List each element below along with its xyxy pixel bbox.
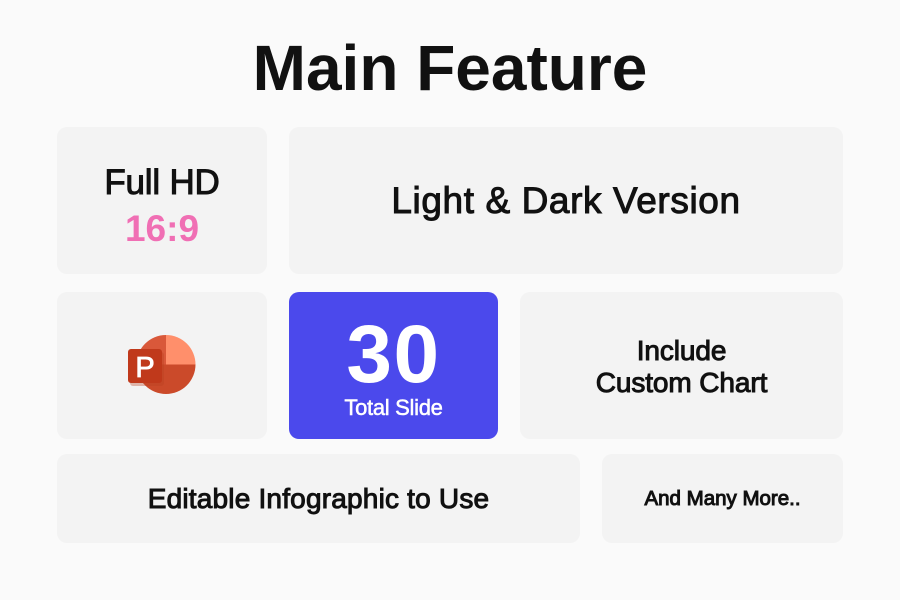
- icon: powerpoint logo: [128, 335, 196, 394]
- number: 30: 30: [346, 309, 441, 400]
- label: 16:9: 16:9: [125, 208, 199, 249]
- panel: powerpoint: [57, 292, 267, 439]
- label: light and dark version: Light & Dark Version: [391, 180, 741, 221]
- title: Main Feature: [253, 32, 647, 104]
- panel: editable infographic: [57, 454, 580, 543]
- panel: and many more: [602, 454, 843, 543]
- panel: light and dark version: [289, 127, 843, 274]
- label: include custom chart: Custom Chart: [596, 367, 767, 398]
- panel: total slide: [289, 292, 498, 439]
- panel: include custom chart: [520, 292, 843, 439]
- label: include custom chart: [596, 335, 768, 398]
- label: editable infographic: Editable Infographic to Use: [148, 483, 489, 514]
- label: total slide: Total Slide: [344, 395, 443, 420]
- label: include custom chart: Include: [637, 335, 726, 366]
- panel: full hd: [57, 127, 267, 274]
- label: full hd: Full HD: [104, 163, 220, 202]
- icon: powerpoint logo: P: [135, 352, 155, 384]
- label: and many more: And Many More..: [644, 487, 801, 510]
